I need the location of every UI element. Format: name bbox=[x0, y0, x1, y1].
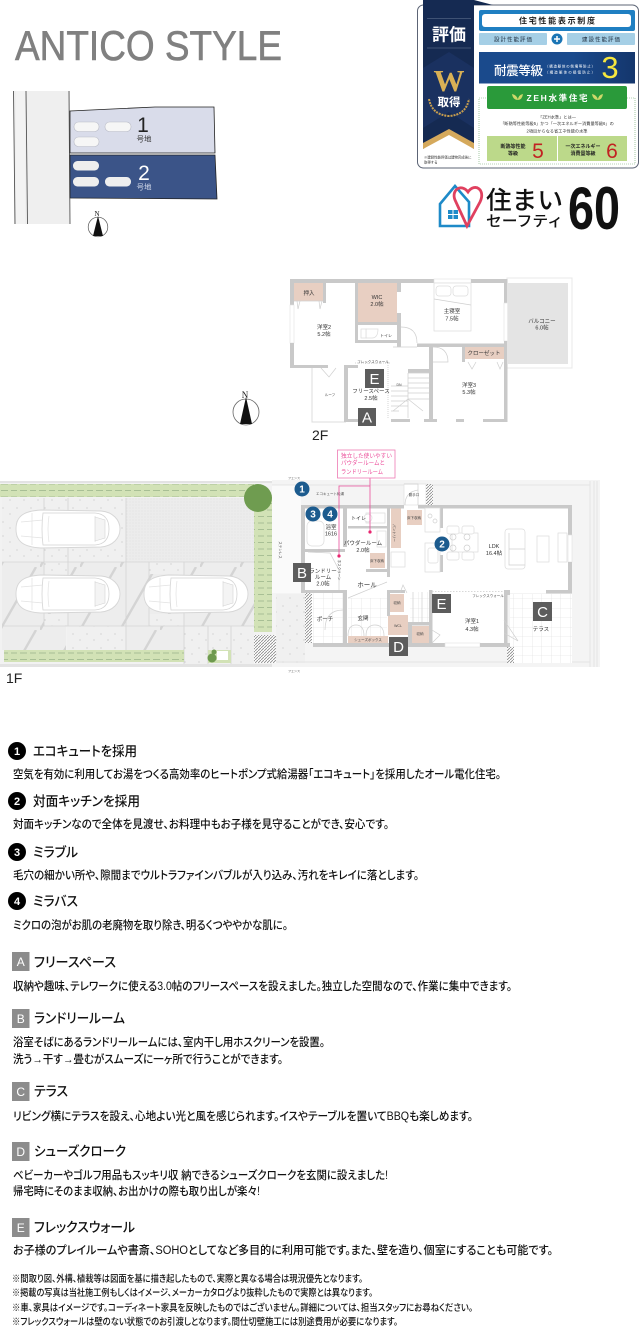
room labels: 床下収納 bbox=[370, 558, 384, 563]
balcony: バルコニー bbox=[528, 318, 556, 325]
room labels: ステンレス bbox=[278, 541, 283, 559]
room labels: トイレ bbox=[351, 516, 366, 522]
room labels: 洋室3 bbox=[462, 381, 476, 389]
note: 取得する bbox=[424, 160, 438, 164]
logo: sumai safety 60 bbox=[440, 175, 620, 242]
room labels: 5.3帖 bbox=[462, 388, 476, 396]
room labels: ホール bbox=[357, 581, 377, 589]
room labels: フレックスウォール bbox=[472, 593, 504, 598]
marker 3 bbox=[306, 506, 320, 522]
title: ANTICO STYLE bbox=[15, 22, 282, 69]
hedges bbox=[0, 484, 272, 663]
room labels: 1616 bbox=[325, 532, 337, 538]
feature B: B bbox=[17, 1012, 25, 1026]
room labels: 7.5帖 bbox=[445, 314, 459, 322]
lot 1 bbox=[70, 107, 215, 153]
marker 2 bbox=[434, 536, 450, 552]
floor plan 1F bbox=[0, 475, 600, 686]
footnotes: ※車、家具はイメージです。コーディネート家具を反映したものではございません。詳細については、担当スタッフにお尋ねください。 bbox=[12, 1302, 473, 1314]
feature B: 浴室そばにあるランドリールームには、室内干し用ホスクリーンを設置。 bbox=[13, 1035, 325, 1049]
room labels: ホスクリーン bbox=[337, 560, 342, 581]
callout: powder and laundry room: ランドリールーム bbox=[341, 469, 383, 476]
note bbox=[424, 154, 472, 164]
footnotes bbox=[12, 1273, 473, 1326]
room labels: 玄関 bbox=[357, 614, 369, 622]
marker E bbox=[432, 594, 451, 613]
storage rooms bbox=[294, 283, 504, 359]
feature 4 bbox=[8, 892, 288, 932]
feature 3: 毛穴の細かい所や、隙間までウルトラファインバブルが入り込み、汚れをキレイに落とします。 bbox=[13, 868, 419, 882]
footnotes: ※間取り図、外構、植栽等は図面を基に描き起したもので、実際と異なる場合は現況優先となります。 bbox=[12, 1273, 363, 1285]
feature 3 bbox=[8, 843, 419, 882]
tiled terrace and porch bbox=[312, 592, 572, 663]
feature E: お子様のプレイルームや書斎、SOHOとしてなど多目的に利用可能です。また、壁を造り、個室にすることも可能です。 bbox=[13, 1243, 553, 1257]
room labels: 主寝室 bbox=[444, 307, 461, 315]
room labels: フェンス bbox=[288, 668, 300, 673]
cars bbox=[16, 510, 248, 613]
marker E: E bbox=[369, 371, 380, 388]
floor plan 2F bbox=[290, 278, 572, 443]
room labels bbox=[278, 475, 549, 673]
logo: sumai safety 60: 60 bbox=[568, 175, 620, 242]
house floor bbox=[301, 484, 572, 647]
feature 1: 1 bbox=[14, 746, 20, 758]
ZEH panel: 「断熱等性能等級5」かつ「一次エネルギー消費量等級6」の bbox=[500, 120, 614, 127]
feature D: ベビーカーやゴルフ用品もスッキリ収 納できるシューズクロークを玄関に設えました! bbox=[13, 1168, 388, 1182]
ZEH panel: ZEH水準住宅 bbox=[526, 93, 588, 103]
evaluation boxes bbox=[479, 33, 635, 45]
stairs bbox=[390, 373, 429, 418]
room labels: フェンス bbox=[288, 475, 300, 480]
floor label 1F: 1F bbox=[6, 670, 22, 686]
marker 4 bbox=[322, 506, 338, 522]
marker E bbox=[365, 369, 384, 388]
logo: sumai safety 60: セーフティ bbox=[486, 213, 563, 230]
room labels: ポーチ bbox=[317, 616, 333, 623]
feature C bbox=[12, 1082, 473, 1123]
performance badge bbox=[418, 0, 638, 168]
seismic grade band: 耐震等級 bbox=[494, 63, 543, 78]
ZEH panel bbox=[479, 86, 635, 164]
room labels: 2.5帖 bbox=[364, 394, 378, 402]
marker B: B bbox=[297, 565, 307, 582]
note: ※建設性能評価は建物完成後に bbox=[424, 154, 472, 160]
feature B: 洗う→干す→畳むがスムーズに一ヶ所で行うことができます。 bbox=[13, 1052, 283, 1066]
feature B bbox=[12, 1009, 325, 1066]
ribbon bbox=[423, 0, 493, 149]
room labels: 2.0帖 bbox=[316, 580, 330, 588]
icon: north arrow 2F: N bbox=[242, 390, 249, 400]
seismic grade band bbox=[479, 50, 635, 85]
feature C: C bbox=[16, 1085, 25, 1099]
room labels: シューズボックス bbox=[354, 637, 382, 642]
room labels: 浴室 bbox=[325, 523, 337, 531]
ribbon: 取得 bbox=[438, 95, 460, 109]
feature 3: 3 bbox=[14, 847, 20, 859]
room labels: フレックスウォール bbox=[357, 359, 389, 364]
room labels: エコキュート給湯 bbox=[316, 491, 344, 496]
storage rooms: 押入 bbox=[303, 289, 315, 297]
room labels: 収納 bbox=[394, 600, 401, 605]
ZEH panel: 一次エネルギー bbox=[565, 143, 601, 150]
feature 2: 対面キッチンなので全体を見渡せ、お料理中もお子様を見守ることができ、安心です。 bbox=[13, 817, 389, 831]
marker A bbox=[358, 408, 376, 426]
feature 1: エコキュートを採用 bbox=[33, 744, 137, 759]
storage rooms: 2.0帖 bbox=[370, 300, 384, 308]
callout: powder and laundry room: 独立した使いやすい bbox=[341, 452, 392, 460]
site map bbox=[14, 91, 217, 237]
room labels: 洋室2 bbox=[317, 323, 331, 331]
feature 2 bbox=[8, 792, 389, 831]
room labels: ルーム bbox=[315, 574, 332, 581]
feature 1 bbox=[8, 742, 501, 781]
walls bbox=[301, 505, 572, 647]
marker 3: 3 bbox=[310, 510, 316, 520]
marker 2: 2 bbox=[439, 540, 445, 550]
room labels: WCL bbox=[394, 624, 402, 628]
seismic grade band: （構造躯体の倒壊等防止） bbox=[545, 64, 595, 68]
balcony: 6.0帖 bbox=[535, 324, 549, 332]
ZEH panel: 消費量等級 bbox=[570, 150, 596, 157]
lot 1: 1 bbox=[137, 114, 149, 137]
logo: sumai safety 60: 住まい bbox=[486, 187, 563, 215]
parking and yard bbox=[0, 481, 272, 667]
feature 1: 空気を有効に利用してお湯をつくる高効率のヒートポンプ式給湯器「エコキュート」を採用したオール電化住宅。 bbox=[13, 767, 501, 781]
room labels: 洋室1 bbox=[465, 617, 479, 625]
ZEH panel: 断熱等性能 bbox=[500, 143, 526, 150]
feature D: シューズクローク bbox=[34, 1143, 126, 1159]
roof outline bbox=[312, 368, 346, 422]
feature D: 帰宅時にそのまま収納、お出かけの際も取り出しが楽々! bbox=[13, 1184, 260, 1198]
balcony bbox=[507, 278, 572, 368]
feature 3: ミラブル bbox=[33, 844, 78, 860]
feature D bbox=[12, 1142, 388, 1198]
room labels: ルーフ bbox=[325, 392, 335, 397]
room labels: パントリー bbox=[392, 524, 397, 542]
feature A: フリースペース bbox=[34, 955, 116, 970]
room labels: 4.3帖 bbox=[465, 625, 479, 633]
lot 2: 2 bbox=[138, 162, 150, 185]
marker A: A bbox=[362, 410, 372, 426]
header bbox=[479, 10, 635, 31]
room labels bbox=[317, 307, 476, 402]
marker 4: 4 bbox=[327, 510, 333, 520]
furniture and fixtures bbox=[307, 484, 567, 643]
marker C bbox=[533, 602, 552, 621]
feature 2: 対面キッチンを採用 bbox=[33, 794, 140, 809]
seismic grade band: （構造躯体の損傷防止） bbox=[545, 70, 595, 74]
room labels: ランドリー bbox=[309, 568, 337, 575]
room labels: 5.2帖 bbox=[317, 330, 331, 338]
marker 1 bbox=[294, 482, 310, 496]
feature A: 収納や趣味、テレワークに使える3.0帖のフリースペースを設えました。独立した空間なので、作業に集中できます。 bbox=[13, 979, 512, 993]
feature A bbox=[12, 952, 512, 993]
icon: house and heart bbox=[440, 186, 482, 226]
feature E: フレックスウォール bbox=[34, 1220, 135, 1235]
callout: powder and laundry room bbox=[337, 450, 395, 558]
room labels: パウダールーム bbox=[344, 539, 383, 547]
seismic grade band: 3 bbox=[601, 50, 619, 85]
room labels: LDK bbox=[489, 544, 500, 550]
feature B: ランドリールーム bbox=[34, 1011, 125, 1026]
ZEH panel: 5 bbox=[532, 140, 544, 163]
room labels: 収納 bbox=[416, 631, 424, 636]
callout: powder and laundry room: パウダールームと bbox=[341, 459, 385, 467]
footnotes: ※掲載の写真は当社施工例もしくはイメージ、メーカーカタログより抜粋したもので実際とは異なります。 bbox=[12, 1287, 373, 1299]
tree bbox=[244, 484, 272, 512]
icon: north arrow: N bbox=[94, 210, 100, 218]
header: 住宅性能表示制度 bbox=[519, 16, 595, 26]
road bbox=[14, 91, 70, 224]
feature D: D bbox=[16, 1145, 25, 1159]
marker E: E bbox=[436, 596, 447, 613]
ribbon: 評価 bbox=[432, 26, 466, 44]
ribbon: W bbox=[434, 63, 464, 98]
room labels: トイレ bbox=[380, 333, 392, 338]
marker D: D bbox=[393, 639, 404, 656]
lot 2 bbox=[70, 155, 217, 199]
icon: north arrow 2F bbox=[233, 390, 259, 425]
lot 1: 号地 bbox=[136, 134, 152, 144]
room labels: 16.4帖 bbox=[486, 549, 503, 557]
hatched areas bbox=[254, 484, 514, 663]
room labels: 床下収納 bbox=[407, 515, 421, 520]
feature 4: 4 bbox=[14, 896, 21, 908]
room labels: フリースペース bbox=[352, 388, 390, 395]
ZEH panel: 6 bbox=[606, 140, 618, 163]
feature 2: 2 bbox=[14, 796, 20, 808]
ZEH panel: 等級 bbox=[508, 150, 518, 157]
evaluation boxes: 設計性能評価 bbox=[494, 36, 532, 44]
marker 1: 1 bbox=[299, 484, 305, 496]
lot 2: 号地 bbox=[136, 182, 152, 192]
storage rooms: クローゼット bbox=[467, 349, 501, 357]
room labels: DN bbox=[396, 383, 402, 387]
room labels: テラス bbox=[533, 626, 549, 633]
feature 4: ミラバス bbox=[33, 894, 78, 909]
marker B bbox=[293, 563, 311, 582]
floor label 2F: 2F bbox=[312, 427, 328, 443]
evaluation boxes: 建設性能評価 bbox=[582, 36, 620, 44]
feature 4: ミクロの泡がお肌の老廃物を取り除き、明るくつややかな肌に。 bbox=[13, 918, 288, 932]
feature C: テラス bbox=[34, 1084, 68, 1099]
room labels: 勝手口 bbox=[409, 492, 420, 497]
feature E: E bbox=[17, 1221, 25, 1235]
furniture and fixtures bbox=[294, 283, 503, 418]
house lot ground bbox=[272, 480, 600, 667]
walls bbox=[290, 279, 508, 422]
feature E bbox=[12, 1218, 553, 1257]
ZEH panel: 「ZEH水準」とは― bbox=[538, 114, 577, 120]
feature C: リビング横にテラスを設え、心地よい光と風を感じられます。イスやテーブルを置いてBBQも楽しめます。 bbox=[13, 1109, 473, 1123]
feature A: A bbox=[17, 955, 25, 969]
storage rooms bbox=[348, 508, 429, 643]
marker C: C bbox=[537, 604, 548, 621]
storage rooms: WIC bbox=[372, 295, 382, 301]
ZEH panel: 2項目からなる省エネ性能の水準 bbox=[527, 128, 587, 134]
marker D bbox=[389, 637, 408, 656]
icon: north arrow bbox=[88, 210, 108, 237]
room labels: 2.0帖 bbox=[356, 546, 370, 554]
